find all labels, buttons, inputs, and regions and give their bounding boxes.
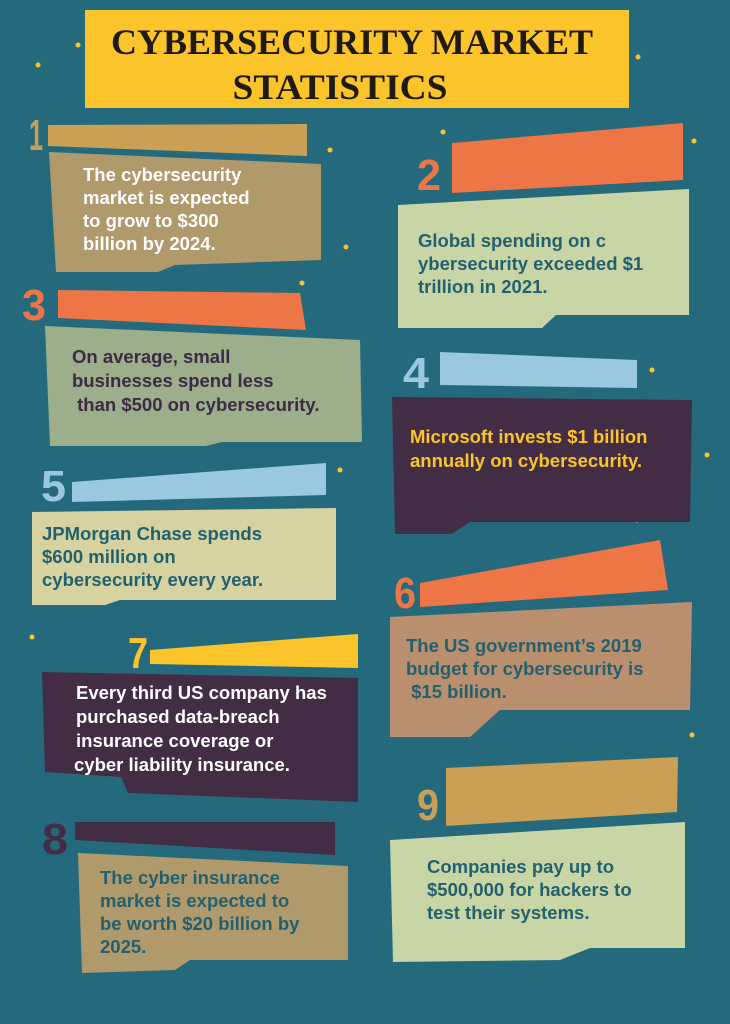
- panel 3: [22, 281, 362, 446]
- panel 8: market is expected to: [100, 890, 289, 911]
- panel 8: 2025.: [100, 936, 146, 957]
- panel 6: The US government’s 2019: [406, 635, 642, 656]
- panel 1: to grow to $300: [83, 210, 219, 231]
- panel 8: [42, 815, 348, 973]
- panel 7: Every third US company has: [76, 682, 327, 703]
- panel 3: 3: [22, 281, 46, 330]
- title: CYBERSECURITY MARKET: [111, 22, 593, 62]
- panel 9: test their systems.: [427, 902, 589, 923]
- panel 4: [392, 349, 692, 534]
- panel 6: budget for cybersecurity is: [406, 658, 643, 679]
- panel 4: annually on cybersecurity.: [410, 450, 642, 471]
- panel 2: trillion in 2021.: [418, 276, 548, 297]
- panel 7: 7: [128, 629, 148, 678]
- panel 8: 8: [42, 815, 68, 864]
- panel 9: $500,000 for hackers to: [427, 879, 632, 900]
- panel 3: businesses spend less: [72, 370, 274, 391]
- panel 4: 4: [403, 349, 430, 398]
- panel 7: [42, 629, 358, 802]
- panel 8: be worth $20 billion by: [100, 913, 300, 934]
- panel 7: purchased data-breach: [76, 706, 280, 727]
- panel 5: $600 million on: [42, 546, 176, 567]
- panel 4: Microsoft invests $1 billion: [410, 426, 647, 447]
- panel 5: 5: [41, 462, 66, 511]
- panel 9: 9: [417, 781, 439, 830]
- title: [85, 10, 629, 108]
- panel 9: Companies pay up to: [427, 856, 614, 877]
- panel 3: On average, small: [72, 346, 230, 367]
- panel 1: 1: [29, 111, 43, 160]
- panel 5: [32, 462, 336, 605]
- panel 1: billion by 2024.: [83, 233, 216, 254]
- panel 2: ybersecurity exceeded $1: [418, 253, 643, 274]
- panel 6: [390, 540, 692, 737]
- panel 7: cyber liability insurance.: [74, 754, 290, 775]
- panel 5: JPMorgan Chase spends: [42, 523, 262, 544]
- panel 8: The cyber insurance: [100, 867, 280, 888]
- panel 5: cybersecurity every year.: [42, 569, 263, 590]
- panel 6: $15 billion.: [406, 681, 507, 702]
- panel 1: The cybersecurity: [83, 164, 242, 185]
- panel 2: Global spending on c: [418, 230, 606, 251]
- panel 6: 6: [394, 569, 416, 618]
- panel 2: 2: [417, 151, 441, 200]
- panel 1: [29, 111, 321, 272]
- panel 3: than $500 on cybersecurity.: [72, 394, 319, 415]
- panel 1: market is expected: [83, 187, 250, 208]
- panel 7: insurance coverage or: [76, 730, 273, 751]
- panel 2: [398, 123, 689, 328]
- panel 9: [390, 757, 685, 962]
- title: STATISTICS: [232, 67, 448, 107]
